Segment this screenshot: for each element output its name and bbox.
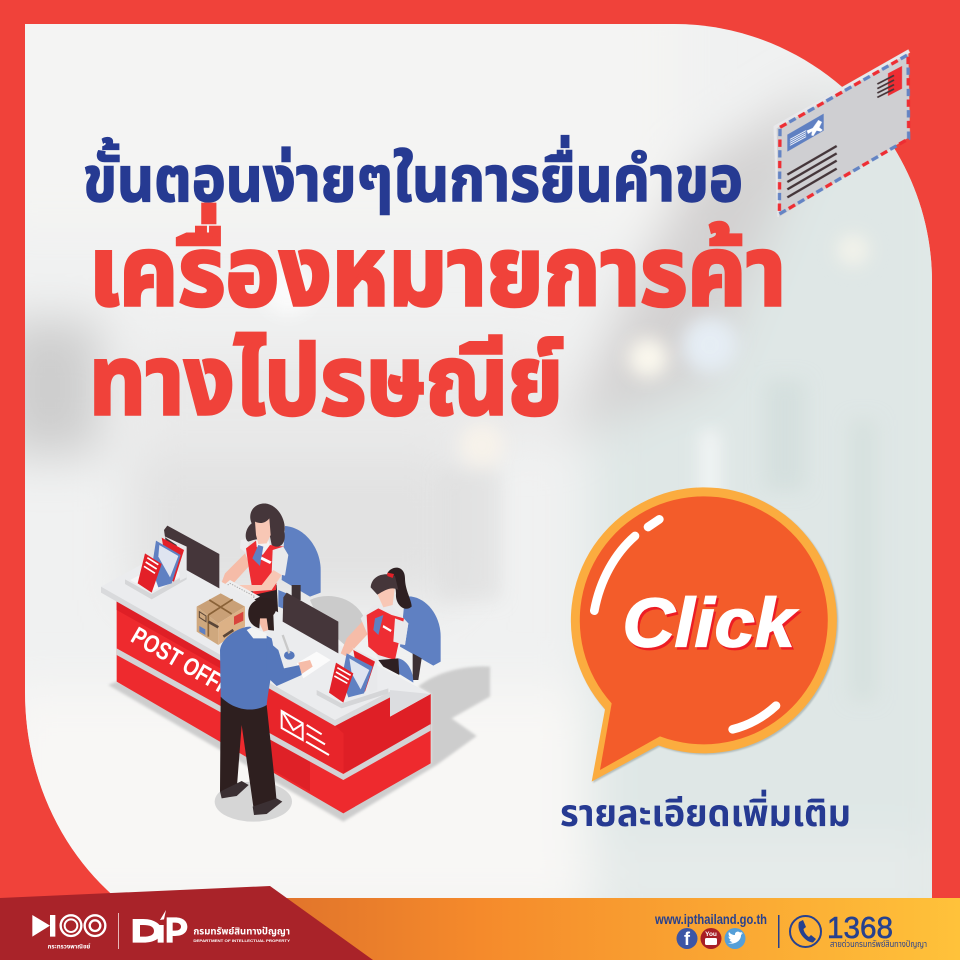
heading: line 1: ขั้นตอนง่ายๆในการยื่นคำขอ	[83, 135, 743, 215]
department thai name: กรมทรัพย์สินทางปัญญา	[193, 925, 290, 937]
hotline number: 1368	[827, 910, 893, 945]
back chair right	[398, 596, 441, 683]
footer dark red ministry band	[0, 886, 373, 960]
bubble inner	[580, 496, 828, 770]
footer gradient bar	[0, 898, 960, 960]
right monitor	[283, 593, 338, 653]
left book stand	[125, 535, 187, 599]
icon: youtube: You	[705, 931, 717, 938]
left monitor	[164, 526, 219, 588]
icon: phone circle	[790, 916, 821, 947]
paper and pen	[283, 635, 331, 678]
bubble shadow	[572, 489, 838, 783]
gloss highlights	[594, 519, 776, 729]
customer	[220, 598, 313, 815]
heading: line 2: เครื่องหมายการค้า	[89, 204, 786, 326]
heading: line 3: ทางไปรษณีย์	[89, 326, 563, 435]
icon: youtube	[700, 928, 722, 949]
logo: MOC ministry: กระทรวงพาณิชย์	[48, 944, 91, 950]
website address: www.ipthailand.go.th	[654, 912, 767, 927]
bubble outer	[571, 487, 837, 782]
divider near hotline	[778, 915, 780, 948]
department english name: DEPARTMENT OF INTELLECTUAL PROPERTY	[193, 939, 291, 943]
wall shadow behind clerks	[310, 596, 367, 647]
icon: facebook	[676, 928, 698, 949]
mail icon on counter	[282, 711, 329, 755]
callout: click speech bubble	[571, 487, 838, 783]
counter top	[101, 552, 431, 720]
caption: more details: รายละเอียดเพิ่มเติม	[560, 789, 851, 834]
feet shadow	[215, 782, 292, 822]
icon: facebook: f	[684, 929, 691, 949]
counter grey stripe	[117, 648, 431, 780]
icon: twitter	[724, 928, 746, 949]
click shadow text: Click	[625, 587, 800, 664]
clerk right	[341, 568, 412, 675]
divider between logos	[118, 913, 119, 949]
right book stand	[317, 647, 388, 708]
back chair left	[278, 526, 321, 610]
POST OFFICE label: POST OFFI	[126, 622, 230, 698]
icon: air mail envelope	[773, 49, 910, 217]
logo: DIP department	[133, 910, 291, 943]
floor shadow	[108, 666, 490, 822]
illustration: post office counter	[101, 503, 490, 822]
counter red body	[117, 601, 431, 813]
click text: Click	[623, 585, 798, 662]
parcel	[197, 593, 245, 645]
clerk left	[220, 503, 288, 617]
hotline caption: สายด่วนกรมทรัพย์สินทางปัญญา	[830, 939, 927, 949]
logo: MOC ministry	[32, 915, 105, 950]
